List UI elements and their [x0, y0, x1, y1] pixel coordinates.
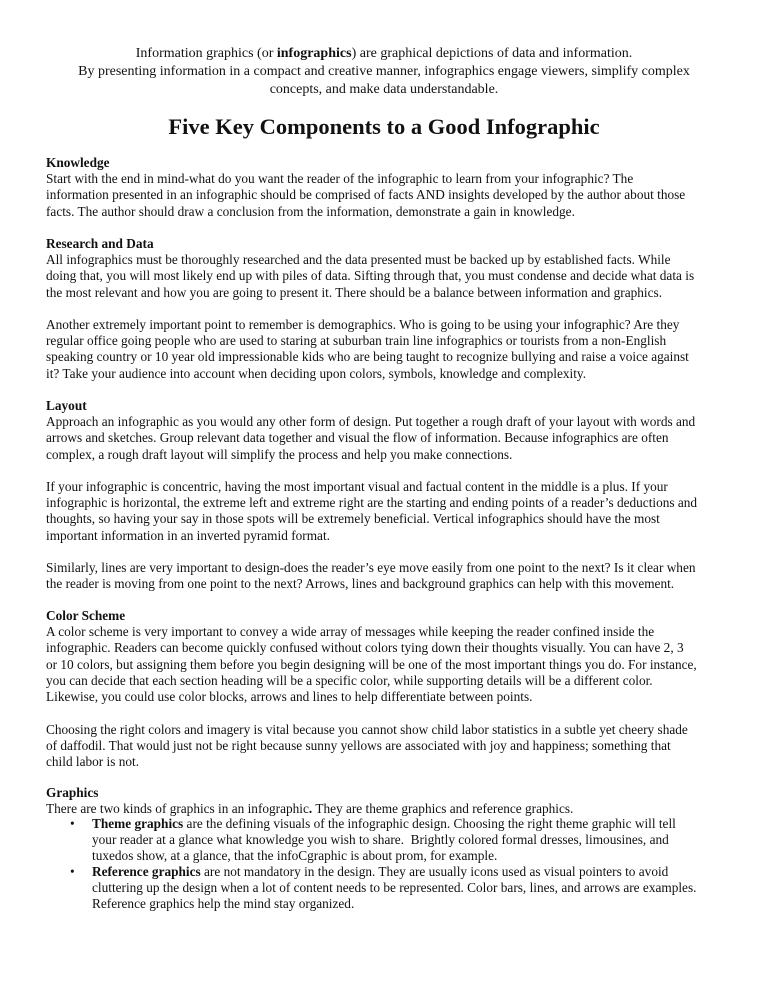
bullet: reference graphics	[70, 864, 696, 911]
text: concentric layouts: important information in an inverted pyramid format.	[46, 528, 330, 543]
text: demographics	[46, 317, 689, 381]
section: graphics	[46, 785, 573, 816]
section: knowledge: Knowledge	[46, 155, 110, 170]
section: color scheme: or 10 colors, but assigning them before you begin designing will be one of the most important things you do. For instance,	[46, 657, 697, 672]
section: research and data: the most relevant and how you are going to present it. There should be a balance between information and graphics.	[46, 285, 662, 300]
section: research and data	[46, 236, 694, 300]
section: knowledge	[46, 155, 685, 219]
section: layout: Approach an infographic as you would any other form of design. Put together a rough draft of your layout with words and	[46, 414, 695, 429]
bullet: theme graphics: Theme graphics are the defining visuals of the infographic design. Choosing the right theme graphic will tell	[92, 816, 676, 831]
section: color scheme	[46, 608, 697, 704]
text: lines: Similarly, lines are very important to design-does the reader’s eye move easily from one point to the next? Is it clear when	[46, 560, 696, 575]
section: graphics: Graphics	[46, 785, 98, 800]
text: lines	[46, 560, 696, 591]
section: research and data: All infographics must be thoroughly researched and the data presented must be backed up by established facts. While	[46, 252, 671, 267]
section: knowledge: facts. The author should draw a conclusion from the information, demonstrate a gain in knowledge.	[46, 204, 575, 219]
bullet: reference graphics: Reference graphics are not mandatory in the design. They are usually icons used as visual pointers to avoid	[92, 864, 668, 879]
text: demographics: speaking country or 10 year old impressionable kids who are being taught to recognize bullying and raise a voice against	[46, 349, 689, 364]
section: layout: arrows and sketches. Group relevant data together and visual the flow of information. Because infographics are often	[46, 430, 669, 445]
section: color scheme: infographic. Readers can become quickly confused without colors tying down their thoughts visually. You can have 2, 3	[46, 640, 684, 655]
text: concentric layouts	[46, 479, 697, 543]
section: research and data: Research and Data	[46, 236, 154, 251]
text: lines: the reader is moving from one point to the next? Arrows, lines and background graphics can help with this movement.	[46, 576, 674, 591]
section: graphics: There are two kinds of graphics in an infographic. They are theme graphics and reference graphics.	[46, 801, 573, 816]
section: color scheme: you can decide that each section heading will be a specific color, while supporting details will be a different color.	[46, 673, 653, 688]
text: concentric layouts: thoughts, so having your say in those spots will be extremely beneficial. Vertical infographics should have the most	[46, 511, 660, 526]
intro text: Information graphics (or infographics) are graphical depictions of data and information.	[136, 46, 632, 61]
text: •	[70, 816, 75, 831]
section: layout: Layout	[46, 398, 87, 413]
text: choosing colors: of daffodil. That would just not be right because sunny yellows are associated with joy and happiness; something that	[46, 738, 671, 753]
bullet: reference graphics: Reference graphics help the mind stay organized.	[92, 896, 354, 911]
text: choosing colors: child labor is not.	[46, 754, 139, 769]
section: layout	[46, 398, 695, 462]
intro text	[78, 46, 690, 97]
text: demographics: Another extremely important point to remember is demographics. Who is going to be using your infographic? Are they	[46, 317, 679, 332]
text: demographics: regular office going people who are used to staring at suburban train line infographics or tourists from a non-English	[46, 333, 666, 348]
intro text: By presenting information in a compact and creative manner, infographics engage viewers, simplify complex	[78, 64, 690, 79]
section: color scheme: Likewise, you could use color blocks, arrows and lines to help differentiate between points.	[46, 689, 532, 704]
intro text: concepts, and make data understandable.	[270, 82, 498, 97]
section: color scheme: A color scheme is very important to convey a wide array of messages while keeping the reader confined inside the	[46, 624, 654, 639]
title: Five Key Components to a Good Infographic	[168, 114, 600, 139]
section: research and data: doing that, you will most likely end up with piles of data. Sifting through that, you must condense and decide what data is	[46, 268, 694, 283]
section: knowledge: Start with the end in mind-what do you want the reader of the infographic to learn from your infographic? The	[46, 171, 633, 186]
text: concentric layouts: infographic is horizontal, the extreme left and extreme right are the starting and ending points of a reader’s deductions and	[46, 495, 697, 510]
bullet: theme graphics	[70, 816, 676, 863]
text: •	[70, 864, 75, 879]
bullet: theme graphics: tuxedos show, at a glance, that the infoCgraphic is about prom, for example.	[92, 848, 497, 863]
text: choosing colors	[46, 722, 688, 769]
section: layout: complex, a rough draft layout will simplify the process and help you make connections.	[46, 447, 512, 462]
bullet: theme graphics: your reader at a glance what knowledge you wish to share. Brightly colored formal dresses, limousines, and	[92, 832, 669, 847]
section: color scheme: Color Scheme	[46, 608, 125, 623]
section: knowledge: information presented in an infographic should be comprised of facts AND insights developed by the author about those	[46, 187, 685, 202]
text: concentric layouts: If your infographic is concentric, having the most important visual and factual content in the middle is a plus. If your	[46, 479, 668, 494]
text: choosing colors: Choosing the right colors and imagery is vital because you cannot show child labor statistics in a subtle yet cheery shade	[46, 722, 688, 737]
bullet: reference graphics: cluttering up the design when a lot of content needs to be represented. Color bars, lines, and arrows are examples.	[92, 880, 696, 895]
text: demographics: it? Take your audience into account when deciding upon colors, symbols, knowledge and complexity.	[46, 366, 586, 381]
